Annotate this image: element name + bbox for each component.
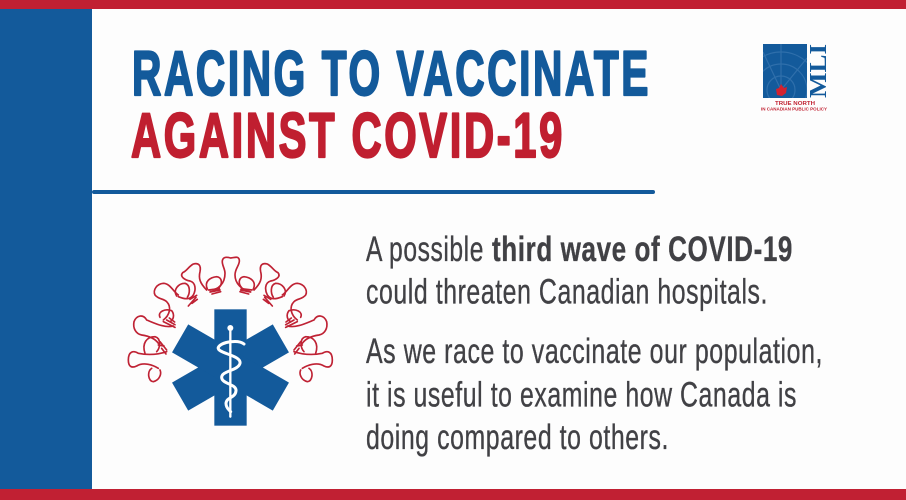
body text bbox=[366, 230, 823, 457]
title bbox=[131, 39, 651, 171]
icon: medical star with virus arc bbox=[128, 257, 332, 426]
paragraph 1 bbox=[366, 230, 793, 312]
paragraph 2: doing compared to others. bbox=[366, 418, 669, 457]
bottom red bar bbox=[0, 489, 906, 500]
virus spikes bbox=[128, 257, 332, 382]
logo tagline: TRUE NORTH bbox=[775, 101, 815, 107]
logo compass arcs bbox=[763, 44, 807, 98]
left blue band bbox=[0, 9, 92, 489]
logo MLI wordmark: MLI bbox=[806, 44, 832, 98]
heading divider bbox=[92, 190, 655, 194]
top red bar bbox=[0, 0, 906, 9]
rod of asclepius bbox=[218, 325, 244, 417]
logo maple leaf bbox=[776, 84, 787, 96]
title line 2: AGAINST COVID-19 bbox=[131, 101, 565, 171]
paragraph 2 bbox=[366, 332, 823, 457]
paragraph 1: A possible bbox=[366, 230, 484, 269]
star of life bbox=[172, 309, 289, 426]
logo square bbox=[763, 44, 807, 98]
paragraph 1: third wave of COVID-19 bbox=[492, 230, 793, 269]
logo tagline 2: IN CANADIAN PUBLIC POLICY bbox=[761, 106, 827, 112]
logo: MLI bbox=[761, 44, 827, 110]
